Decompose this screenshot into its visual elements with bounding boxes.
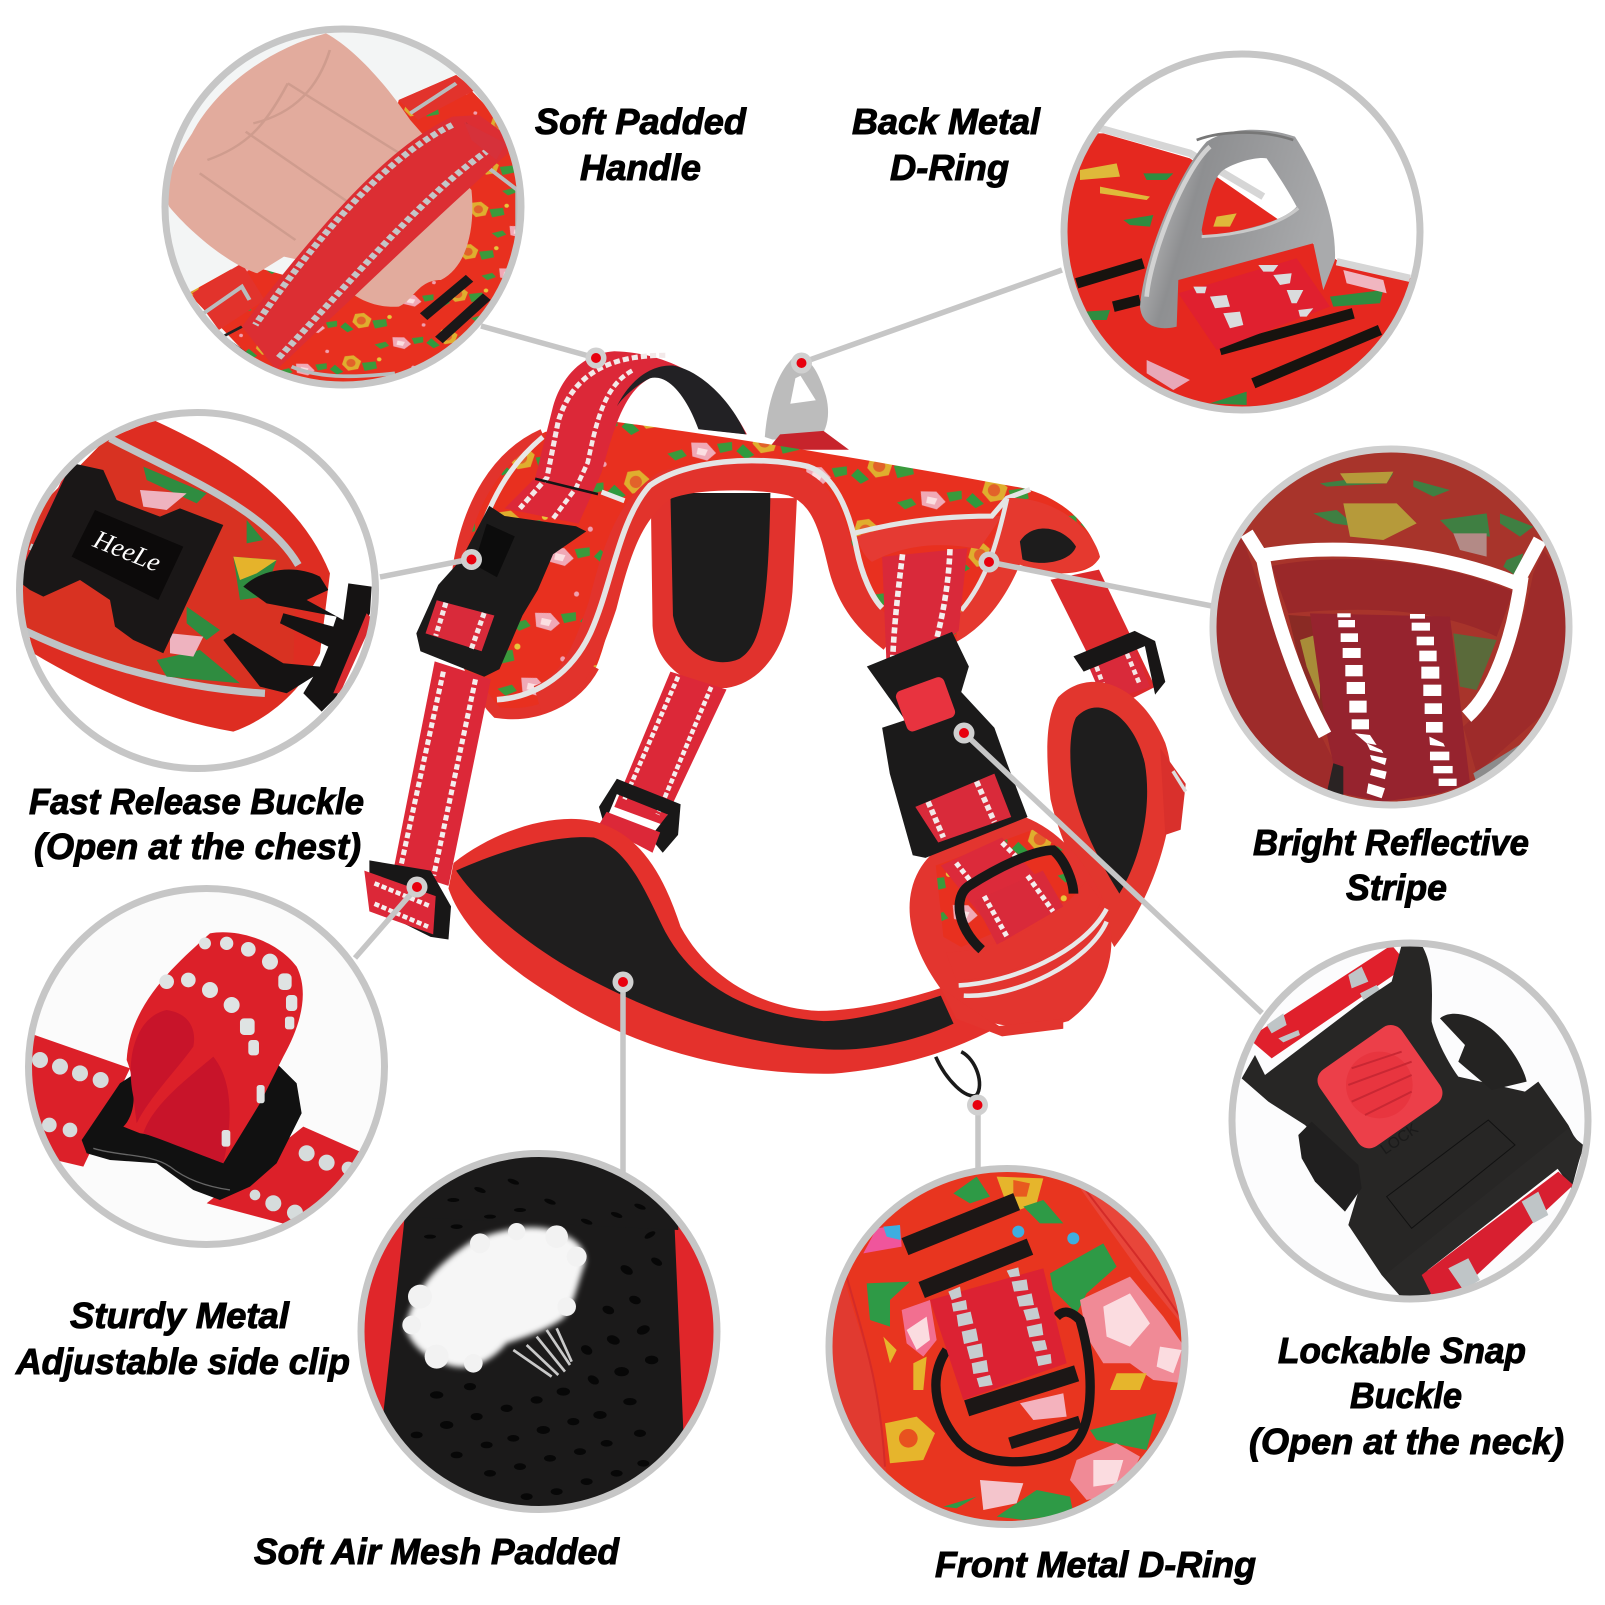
right band <box>1463 550 1573 773</box>
small belly D-ring <box>936 1052 980 1096</box>
buckle upper arm <box>1242 945 1583 1302</box>
snap buckle <box>867 632 1028 858</box>
label: back metal D-ring <box>852 101 1041 188</box>
strap left <box>26 476 66 560</box>
mesh holes <box>411 1177 663 1500</box>
white stitches <box>1337 613 1457 798</box>
reflective stripe left <box>482 437 624 529</box>
inner window <box>1288 615 1324 718</box>
cotton filling <box>405 1227 585 1367</box>
pad lower edge <box>941 988 1063 1036</box>
side wing left <box>1298 1122 1362 1212</box>
handle <box>505 351 747 524</box>
detail circle: air mesh <box>358 1150 720 1513</box>
side wing right <box>1440 1014 1527 1090</box>
male buckle <box>223 570 372 712</box>
detail circle: fast release buckle <box>16 409 379 772</box>
black slider <box>82 1066 302 1200</box>
floral saddle body <box>454 422 1099 716</box>
handle strap <box>242 115 508 370</box>
fast release buckle <box>416 506 586 677</box>
label: sturdy metal side clip: Adjustable side clip <box>15 1341 350 1382</box>
lower bar <box>1385 1128 1583 1298</box>
black stitching <box>905 1202 1017 1247</box>
webbing <box>1310 613 1470 802</box>
lock word: LOCK <box>1378 1120 1422 1158</box>
brand name: HeeLe <box>88 523 165 578</box>
label: lockable snap buckle: (Open at the neck) <box>1249 1421 1564 1462</box>
detail circle: back metal D-ring <box>1060 50 1424 414</box>
detail circle: lockable snap buckle <box>1205 925 1605 1325</box>
dim floral <box>1313 473 1533 577</box>
white reflective piping <box>1247 533 1540 735</box>
label: bright reflective stripe <box>1253 822 1529 908</box>
long side strap <box>394 661 491 886</box>
lower grey shading <box>1473 744 1520 780</box>
rear chest strap <box>1051 570 1165 707</box>
red lock button <box>1312 1020 1448 1154</box>
label: sturdy metal side clip: Sturdy Metal <box>70 1295 290 1336</box>
strap right <box>207 1127 360 1233</box>
label: lockable snap buckle: Lockable Snap <box>1278 1330 1526 1371</box>
right chest band <box>856 489 1100 642</box>
label: front metal D-ring: Front Metal D-Ring <box>935 1544 1256 1585</box>
red webbing <box>1248 945 1408 1058</box>
label: soft padded handle <box>535 101 747 188</box>
black mesh <box>384 1216 684 1506</box>
center roll <box>1272 559 1513 637</box>
side clip slider <box>364 860 451 939</box>
label: fast release buckle <box>29 781 364 867</box>
metal D-ring <box>1140 130 1335 328</box>
label: fast release buckle: (Open at the chest) <box>34 826 361 867</box>
red padded edge <box>13 420 330 732</box>
bottom left dark band <box>1216 540 1333 790</box>
label: bright reflective stripe: Bright Reflective <box>1253 822 1529 863</box>
detail circle: side clip <box>25 885 388 1248</box>
arch reflective stripe <box>497 461 882 700</box>
strap left <box>27 1033 130 1167</box>
center strap <box>599 672 727 853</box>
label: fast release buckle: Fast Release Buckle <box>29 781 364 822</box>
rear padded ring <box>1047 682 1186 947</box>
label: lockable snap buckle: Buckle <box>1350 1375 1462 1416</box>
outlined panel <box>1387 1120 1515 1228</box>
label: soft air mesh padded: Soft Air Mesh Padded <box>254 1531 620 1572</box>
floral inner <box>24 440 110 628</box>
center black mesh pad <box>651 493 797 688</box>
label: back metal D-ring: D-Ring <box>890 147 1009 188</box>
edge folds <box>832 1282 886 1472</box>
detail circle: soft padded handle <box>162 26 524 388</box>
detail circle: bright reflective stripe <box>1210 446 1572 808</box>
red webbing tab <box>930 1268 1067 1400</box>
female buckle <box>17 463 223 653</box>
flowers <box>863 1177 1187 1520</box>
left pad border <box>457 434 594 714</box>
hand <box>167 33 472 307</box>
arch red trim <box>538 476 892 700</box>
label: soft padded handle: Handle <box>580 147 701 188</box>
label: bright reflective stripe: Stripe <box>1346 867 1447 908</box>
floral background <box>188 75 529 393</box>
front pocket pad <box>910 817 1111 1027</box>
chest webbing strap <box>882 548 967 682</box>
connector lines <box>355 270 1262 1175</box>
label: sturdy metal side clip <box>15 1295 350 1382</box>
black stitching <box>424 278 487 340</box>
red webbing tab <box>1178 258 1330 350</box>
harness product photo <box>364 351 1186 1096</box>
back D-ring <box>765 357 849 450</box>
label: back metal D-ring: Back Metal <box>852 101 1041 142</box>
label: soft padded handle: Soft Padded <box>535 101 747 142</box>
lower webbing and D-ring <box>941 837 1073 950</box>
lower window <box>1422 1172 1573 1302</box>
callout dots <box>406 348 1000 1116</box>
detail circle: front metal D-ring <box>826 1165 1188 1528</box>
webbing loop <box>123 932 303 1163</box>
D-ring <box>936 1312 1090 1462</box>
label: lockable snap buckle <box>1249 1330 1564 1462</box>
lower stitching <box>967 1373 1077 1408</box>
red pad strip <box>192 75 475 330</box>
floral fabric <box>1068 133 1410 406</box>
fibres <box>513 1328 572 1377</box>
black stitching <box>1077 263 1380 383</box>
belly mesh pad <box>448 819 999 1074</box>
